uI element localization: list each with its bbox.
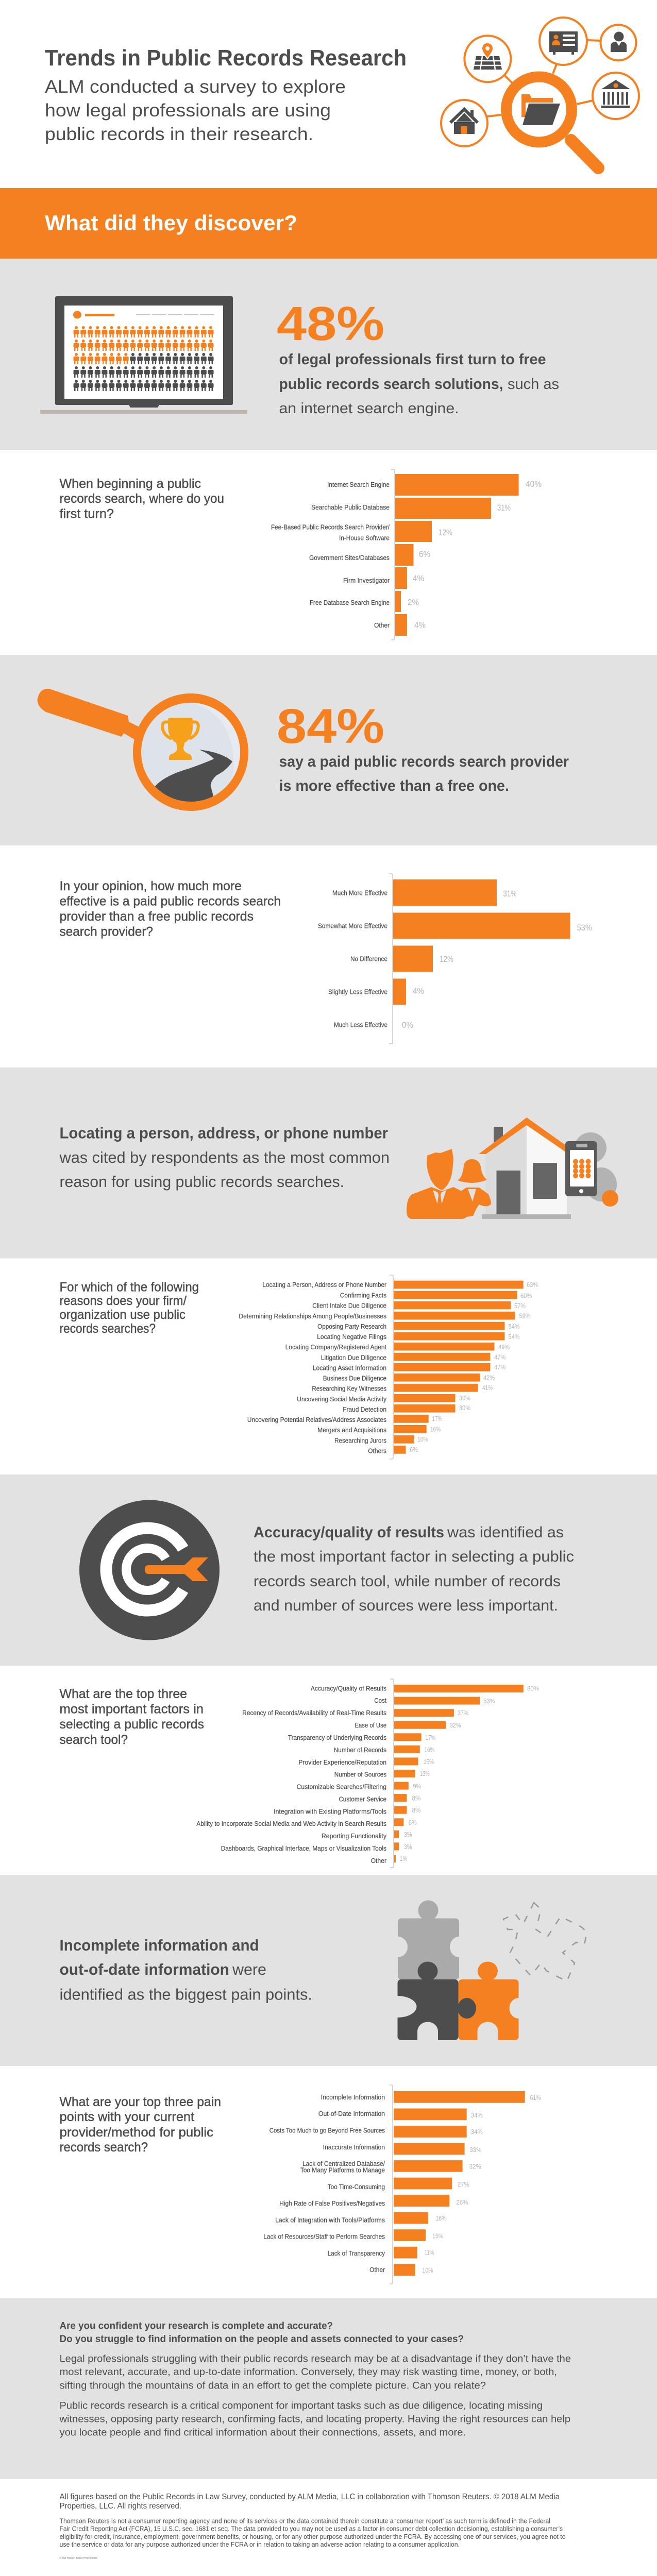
icon: ID card (549, 31, 578, 55)
stat text (60, 1936, 312, 2003)
paragraph: disadvantage: sifting through the mountains of data in an effort to get the complete picture. Can you relate? (60, 2380, 486, 2392)
stat text: was cited by respondents as the most common (59, 1148, 390, 1166)
row: Out-of-Date (318, 2108, 483, 2120)
heading: provider than a free public records (60, 909, 254, 924)
heading (60, 1687, 204, 1747)
row: Asset Information: 47% (494, 1364, 506, 1371)
row: Confirming Facts: 60% (520, 1292, 532, 1299)
row: Customer Service: 8% (412, 1795, 420, 1802)
heading: What are the top three (60, 1687, 187, 1701)
heading: What are your top three pain (60, 2095, 221, 2109)
row: No Difference: 12% (440, 954, 453, 964)
row: No Difference (350, 946, 453, 972)
row: Determining Relationships: Determining Relationships Among People/Businesses (239, 1312, 386, 1320)
row: Dashboards: Dashboards, Graphical Interface, Maps or Visualization Tools (221, 1844, 386, 1852)
icon: people, house and phone (407, 1117, 618, 1219)
row: Fee-Based Provider: In-House Software (339, 534, 390, 542)
row: Incomplete Information (321, 2091, 541, 2103)
row: Fee-Based Provider: 12% (439, 528, 452, 537)
source note: All figures based on the Public Records in Law Survey, conducted by ALM Media, LLC in collaboration with Thomson Reuters. © 2018 ALM Media (60, 2493, 560, 2501)
icon: laptop with people grid (40, 296, 247, 414)
row: Free Database: 2% (408, 598, 419, 607)
stat text: reason for using public records searches. (60, 1173, 344, 1191)
panel: accuracy stat (0, 1475, 657, 1666)
row: Too Time-Consuming: 27% (458, 2181, 469, 2188)
intro text: public records in their research. (45, 124, 313, 144)
icon: phone (565, 1141, 597, 1196)
row: Lack of Centralized Database: 32% (469, 2163, 481, 2170)
row: Negative Filings (317, 1332, 520, 1341)
row: Incomplete Information: 61% (530, 2094, 541, 2102)
row: Internet Search Engine: Internet Search Engine (327, 481, 390, 488)
row: Somewhat More Effective: 53% (577, 923, 592, 933)
stat text: an internet search engine. (279, 400, 459, 417)
row: Internet Search Engine: 40% (526, 479, 542, 489)
row: Provider Experience: Provider Experience/Reputation (298, 1758, 386, 1766)
heading: records search? (60, 2140, 148, 2155)
row: Recency: 37% (458, 1709, 468, 1717)
heading: For which of the following (60, 1280, 199, 1294)
row: Asset Information: Locating Asset Information (313, 1364, 386, 1371)
panel: factors chart (60, 1679, 539, 1868)
row: Fraud Detection: 30% (459, 1404, 470, 1412)
row: Number of Records: 16% (424, 1747, 434, 1754)
row: Litigation: 47% (494, 1354, 506, 1361)
row: Lack of Integration (275, 2212, 446, 2224)
row: False Positives: High Rate of False Positives/Negatives (279, 2199, 385, 2207)
stat text (279, 753, 569, 794)
row: Mergers: 16% (430, 1426, 441, 1433)
row: Too Time-Consuming (328, 2178, 469, 2191)
bar chart: pain points (263, 2085, 541, 2284)
row: Social Media (297, 1394, 470, 1403)
icon: magnifier network (441, 18, 639, 168)
icon: puzzle pieces (378, 1900, 587, 2040)
source note: Properties, LLC. All rights reserved. (60, 2502, 181, 2511)
icon: target with arrow (79, 1500, 220, 1640)
row: Mergers (317, 1425, 441, 1434)
row: Ease of Use: Ease of Use (355, 1721, 386, 1729)
row: Litigation: Litigation Due Diligence (321, 1354, 386, 1361)
icon: house (450, 109, 478, 134)
icon: folder (521, 94, 560, 125)
bar chart: factors (196, 1679, 539, 1868)
row: Government Sites: 6% (419, 549, 430, 559)
row: Jurors (334, 1435, 428, 1445)
row: Lack of Resources: 15% (432, 2233, 443, 2240)
stat text: out-of-date information (60, 1960, 229, 1978)
heading (60, 879, 281, 939)
stat: 84%: 84% (277, 699, 384, 754)
row: Lack of Centralized Database: Lack of Centralized Database/ (302, 2160, 385, 2167)
row: Recency (242, 1709, 468, 1717)
row: Firm Investigator (343, 567, 424, 589)
row: Government Sites (309, 544, 430, 566)
heading: reasons does your firm/ (60, 1294, 187, 1308)
row: Too Time-Consuming: Too Time-Consuming (328, 2183, 385, 2191)
row: Number of Records: Number of Records (334, 1746, 386, 1754)
puzzle piece: orange (458, 1962, 528, 2040)
row: Firm Investigator: Firm Investigator (343, 577, 390, 584)
row: Client Intake (312, 1301, 526, 1310)
row: Customer Service (339, 1794, 420, 1803)
row: Other (369, 2264, 433, 2276)
row: Jurors: 10% (417, 1436, 428, 1443)
paragraph: critical component (59, 2401, 570, 2438)
row: Other (371, 1855, 408, 1865)
row: Transparency: 17% (426, 1734, 435, 1741)
row: Much Less Effective (334, 1020, 413, 1030)
stat text: were (232, 1960, 266, 1978)
row: Key Witnesses (312, 1384, 493, 1392)
row: Slightly Less Effective: 4% (413, 986, 424, 996)
row: Inaccurate: 33% (469, 2146, 481, 2154)
row: Integration: Integration with Existing Platforms/Tools (274, 1807, 386, 1816)
panel: first turn chart (60, 469, 542, 640)
row: Fraud Detection: Fraud Detection (343, 1405, 386, 1413)
heading: selecting a public records (60, 1717, 204, 1732)
paragraph: critical component: you locate people and find critical information about their connections, assets, and more. (60, 2427, 466, 2438)
row: Fee-Based Provider (271, 521, 452, 542)
row: Other: 10% (423, 2267, 433, 2274)
row: Fraud Detection (343, 1404, 470, 1413)
stat text: and number of sources were less important. (254, 1597, 558, 1614)
closing questions (60, 2320, 464, 2345)
row: Provider Experience (298, 1757, 434, 1766)
closing questions: Are you confident your research is complete and accurate? (60, 2320, 333, 2332)
panel: header (45, 18, 639, 168)
legal disclaimer (60, 2518, 566, 2548)
row: Ease of Use: 32% (450, 1722, 461, 1729)
stat text: Incomplete information and (60, 1936, 259, 1954)
row: Inaccurate (323, 2143, 481, 2155)
row: Lack of Resources: Lack of Resources/Staff to Perform Searches (263, 2233, 385, 2240)
row: Others (368, 1446, 418, 1455)
row: Other (374, 614, 426, 636)
row: No Difference: No Difference (350, 955, 388, 962)
row: Free Database (310, 591, 419, 612)
row: Out-of-Date: 34% (471, 2112, 483, 2119)
row: Registered Agent: Locating Company/Registered Agent (285, 1343, 386, 1351)
row: Negative Filings: 54% (509, 1333, 520, 1341)
row: Searchable Public Database (311, 498, 511, 519)
job code: © 2018 Thomson Reuters TR703303 3/18 (60, 2556, 97, 2560)
row: Lack of Transparency: Lack of Transparency (328, 2249, 385, 2257)
bar chart: first turn (271, 469, 542, 640)
stat text: records search tool, while number of records (254, 1573, 561, 1590)
row: Number of Records (334, 1745, 434, 1754)
stat text (279, 351, 559, 417)
icon: trophy (162, 718, 198, 760)
row: Confirming Facts (340, 1291, 532, 1299)
row: Key Witnesses: 41% (482, 1384, 493, 1392)
row: Relatives (247, 1415, 442, 1423)
row: Integration (274, 1806, 420, 1816)
row: Slightly Less Effective (328, 979, 424, 1005)
legal disclaimer: use the service or data for any purpose authorized under the FCRA or in relation to taking an adverse action relating to a consumer application. (60, 2541, 460, 2548)
puzzle piece: gray (388, 1900, 468, 1979)
row: Costs Too Much: 34% (471, 2128, 483, 2136)
row: Lack of Centralized Database (300, 2160, 481, 2174)
heading: records searches? (60, 1321, 156, 1336)
row: Lack of Integration: Lack of Integration with Tools/Platforms (275, 2216, 385, 2224)
row: Registered Agent (285, 1343, 510, 1351)
row: Determining Relationships: 59% (519, 1313, 531, 1320)
row: Determining Relationships (239, 1312, 531, 1320)
row: Business Due Diligence: Business Due Diligence (323, 1375, 386, 1382)
panel: reasons chart (60, 1275, 538, 1459)
row: Other: Other (374, 621, 390, 629)
row: Key Witnesses: Researching Key Witnesses (312, 1385, 386, 1392)
row: Business Due Diligence (323, 1374, 495, 1382)
heading: first turn? (60, 507, 114, 521)
panel: locating stat (0, 1067, 657, 1258)
row: Customizable (297, 1782, 421, 1791)
row: Client Intake: Client Intake Due Diligence (312, 1301, 386, 1310)
panel: pain points stat (0, 1875, 657, 2066)
row: Much Less Effective: Much Less Effective (334, 1021, 388, 1028)
heading: records search, where do you (60, 492, 224, 506)
heading (60, 1280, 199, 1336)
icon: house (479, 1117, 571, 1219)
stat text: was identified as (447, 1524, 564, 1541)
bar chart: reasons (239, 1275, 538, 1459)
heading: effective is a paid public records search (60, 894, 281, 909)
paragraph: disadvantage: most relevant, accurate, and up-to-date information. Conversely, they may risk wasting time, money, or both, (60, 2367, 557, 2378)
row: Firm Investigator: 4% (413, 573, 424, 583)
row: Customer Service: Customer Service (339, 1795, 386, 1803)
heading: points with your current (60, 2110, 194, 2124)
row: Lack of Transparency: 11% (425, 2249, 434, 2257)
heading: search tool? (60, 1733, 128, 1747)
row: Lack of Integration: 16% (436, 2215, 446, 2222)
row: Other: Other (369, 2266, 385, 2274)
row: Much More Effective: Much More Effective (332, 889, 388, 896)
icon: magnifier with trophy (38, 689, 248, 811)
row: Government Sites: Government Sites/Databases (309, 554, 390, 562)
row: Social Media: Uncovering Social Media Activity (297, 1395, 386, 1403)
row: Relatives: 17% (432, 1415, 442, 1422)
heading: search provider? (60, 924, 153, 939)
row: Much Less Effective: 0% (402, 1020, 413, 1030)
stat text (59, 1124, 390, 1191)
legal disclaimer: Fair Credit Reporting Act (FCRA), 15 U.S.C. sec. 1681 et seq. The data provided to you may not be used as a factor in consumer debt collection decisioning, establishing a consumer’s (60, 2526, 563, 2533)
row: Others: Others (368, 1447, 386, 1455)
row: Much More Effective (332, 879, 516, 906)
row: Locating a Person (262, 1281, 538, 1289)
row: Asset Information (313, 1363, 506, 1371)
icon: woman (453, 1159, 491, 1219)
icon: courthouse (601, 80, 630, 108)
row: Transparency: Transparency of Underlying Records (288, 1734, 386, 1741)
row: Social Media: 30% (459, 1395, 470, 1402)
stat text: of legal professionals first turn to free (279, 351, 546, 368)
legal disclaimer: eligibility for credit, insurance, employment, government benefits, or housing, or for any other purpose authorized under the FCRA. By accessing one of our services, you agree not to (60, 2533, 566, 2540)
heading: discover: What did they discover? (45, 211, 297, 235)
row: Litigation (321, 1353, 506, 1361)
row: Opposing Party (317, 1322, 520, 1330)
panel: closing copy (0, 2298, 657, 2479)
row: Jurors: Researching Jurors (334, 1436, 386, 1445)
row: Reporting: 3% (404, 1831, 412, 1838)
row: Relatives: Uncovering Potential Relatives/Address Associates (247, 1416, 386, 1423)
row: Mergers: Mergers and Acquisitions (317, 1426, 386, 1434)
stat text: the most important factor in selecting a public (254, 1548, 574, 1565)
row: Opposing Party: 54% (509, 1323, 520, 1330)
row: Business Due Diligence: 42% (483, 1375, 495, 1382)
row: Others: 6% (410, 1446, 418, 1453)
row: Out-of-Date: Out-of-Date Information (318, 2110, 385, 2117)
stat text: such as (508, 376, 559, 393)
paragraph: disadvantage (60, 2353, 571, 2392)
intro text (45, 77, 346, 144)
row: Fee-Based Provider: Fee-Based Public Records Search Provider/ (271, 523, 390, 531)
row: Number of Sources: 13% (420, 1770, 430, 1777)
icon: person (611, 32, 627, 52)
row: Number of Sources (334, 1770, 430, 1778)
heading: provider/method for public (60, 2125, 213, 2140)
row: Cost: Cost (374, 1697, 386, 1704)
row: Confirming Facts: Confirming Facts (340, 1291, 386, 1299)
heading: In your opinion, how much more (60, 879, 242, 893)
panel: pain points chart (60, 2085, 541, 2284)
row: Provider Experience: 15% (424, 1758, 434, 1766)
stat text (254, 1524, 574, 1614)
row: Free Database: Free Database Search Engine (310, 599, 390, 606)
stat text: public records search solutions, (279, 376, 503, 393)
title: Trends in Public Records Research (45, 45, 407, 71)
row: Reporting: Reporting Functionality (322, 1832, 386, 1840)
row: Lack of Transparency (328, 2247, 434, 2259)
row: Customizable: 9% (413, 1783, 421, 1790)
panel: 84 percent stat (0, 655, 657, 845)
heading: organization use public (60, 1308, 186, 1322)
heading (60, 477, 224, 521)
row: Registered Agent: 49% (498, 1344, 510, 1351)
stat text: say a paid public records search provider (279, 753, 569, 770)
row: Other: 4% (414, 620, 426, 630)
row: Searchable Public Database: Searchable Public Database (311, 503, 390, 511)
stat text: is more effective than a free one. (279, 777, 509, 794)
row: Costs Too Much (269, 2126, 483, 2138)
intro text: how legal professionals are using (45, 100, 331, 121)
row: Dashboards: 3% (404, 1843, 412, 1851)
row: Somewhat More Effective (318, 913, 592, 939)
heading: When beginning a public (60, 477, 201, 491)
panel: effectiveness chart (60, 874, 592, 1044)
row: Ease of Use (355, 1721, 461, 1729)
row: Accuracy: Accuracy/Quality of Results (311, 1685, 386, 1692)
row: Lack of Resources (263, 2229, 443, 2241)
row: Customizable: Customizable Searches/Filtering (297, 1783, 386, 1791)
row: Social Media: 6% (409, 1819, 417, 1826)
row: Lack of Centralized Database: Too Many Platforms to Manage (300, 2166, 385, 2174)
row: Somewhat More Effective: Somewhat More Effective (318, 922, 388, 929)
row: Accuracy (311, 1685, 539, 1692)
row: Client Intake: 57% (514, 1302, 526, 1310)
row: Recency: Recency of Records/Availability of Real-Time Results (242, 1709, 386, 1717)
row: Transparency (288, 1733, 435, 1741)
panel: footer (60, 2493, 566, 2560)
bar chart: effectiveness (318, 874, 592, 1044)
row: Inaccurate: Inaccurate Information (323, 2143, 385, 2151)
stat text: Locating a person, address, or phone number (60, 1124, 388, 1142)
row: Searchable Public Database: 31% (497, 503, 511, 513)
icon: dashed puzzle outline (503, 1903, 587, 1981)
legal disclaimer: Thomson Reuters is not a consumer reporting agency and none of its services or the data contained therein constitute a ‘consumer report’ as such term is defined in the Federal (60, 2518, 550, 2525)
puzzle piece: dark (378, 1962, 459, 2040)
row: Opposing Party: Opposing Party Research (317, 1323, 386, 1330)
heading (60, 2095, 221, 2155)
row: Incomplete Information: Incomplete Information (321, 2093, 385, 2101)
row: False Positives: 26% (456, 2199, 468, 2206)
row: Locating a Person: 63% (527, 1281, 538, 1289)
panel: 48 percent stat (0, 259, 657, 450)
stat: 48%: 48% (277, 297, 384, 350)
row: Locating a Person: Locating a Person, Address or Phone Number (262, 1281, 387, 1289)
paragraph: critical component: Public records research is a critical component for important tasks such as due diligence, locating missing (60, 2401, 543, 2412)
row: Costs Too Much: Costs Too Much to go Beyond Free Sources (269, 2127, 385, 2134)
icon: map pin (474, 43, 502, 70)
row: Other: Other (371, 1857, 387, 1865)
row: Social Media: Ability to Incorporate Social Media and Web Activity in Search Results (196, 1820, 386, 1827)
intro text: ALM conducted a survey to explore (45, 77, 346, 97)
closing questions: Do you struggle to find information on the people and assets connected to your cases? (60, 2334, 464, 2345)
row: Integration: 8% (412, 1807, 420, 1814)
row: False Positives (279, 2195, 468, 2207)
row: Other: 1% (400, 1855, 408, 1862)
row: Cost: 53% (483, 1698, 495, 1705)
icon: man (407, 1149, 468, 1219)
row: Reporting (322, 1831, 412, 1840)
row: Slightly Less Effective: Slightly Less Effective (328, 988, 388, 995)
row: Negative Filings: Locating Negative Filings (317, 1333, 386, 1341)
row: Much More Effective: 31% (503, 889, 516, 899)
row: Number of Sources: Number of Sources (334, 1770, 386, 1778)
stat text: identified as the biggest pain points. (60, 1986, 312, 2003)
paragraph: disadvantage: Legal professionals struggling with their public records research may be at a disadvantage if they don’t have the (60, 2353, 571, 2365)
panel: discover band (0, 188, 657, 259)
row: Cost (374, 1697, 495, 1705)
row: Accuracy: 80% (527, 1685, 539, 1692)
stat text: Accuracy/quality of results (254, 1524, 444, 1541)
row: Internet Search Engine (327, 474, 542, 496)
paragraph: critical component: witnesses, opposing party research, confirming facts, and locating property. Having the right resources can help (59, 2414, 570, 2425)
source note (60, 2493, 560, 2511)
heading: most important factors in (60, 1702, 204, 1717)
